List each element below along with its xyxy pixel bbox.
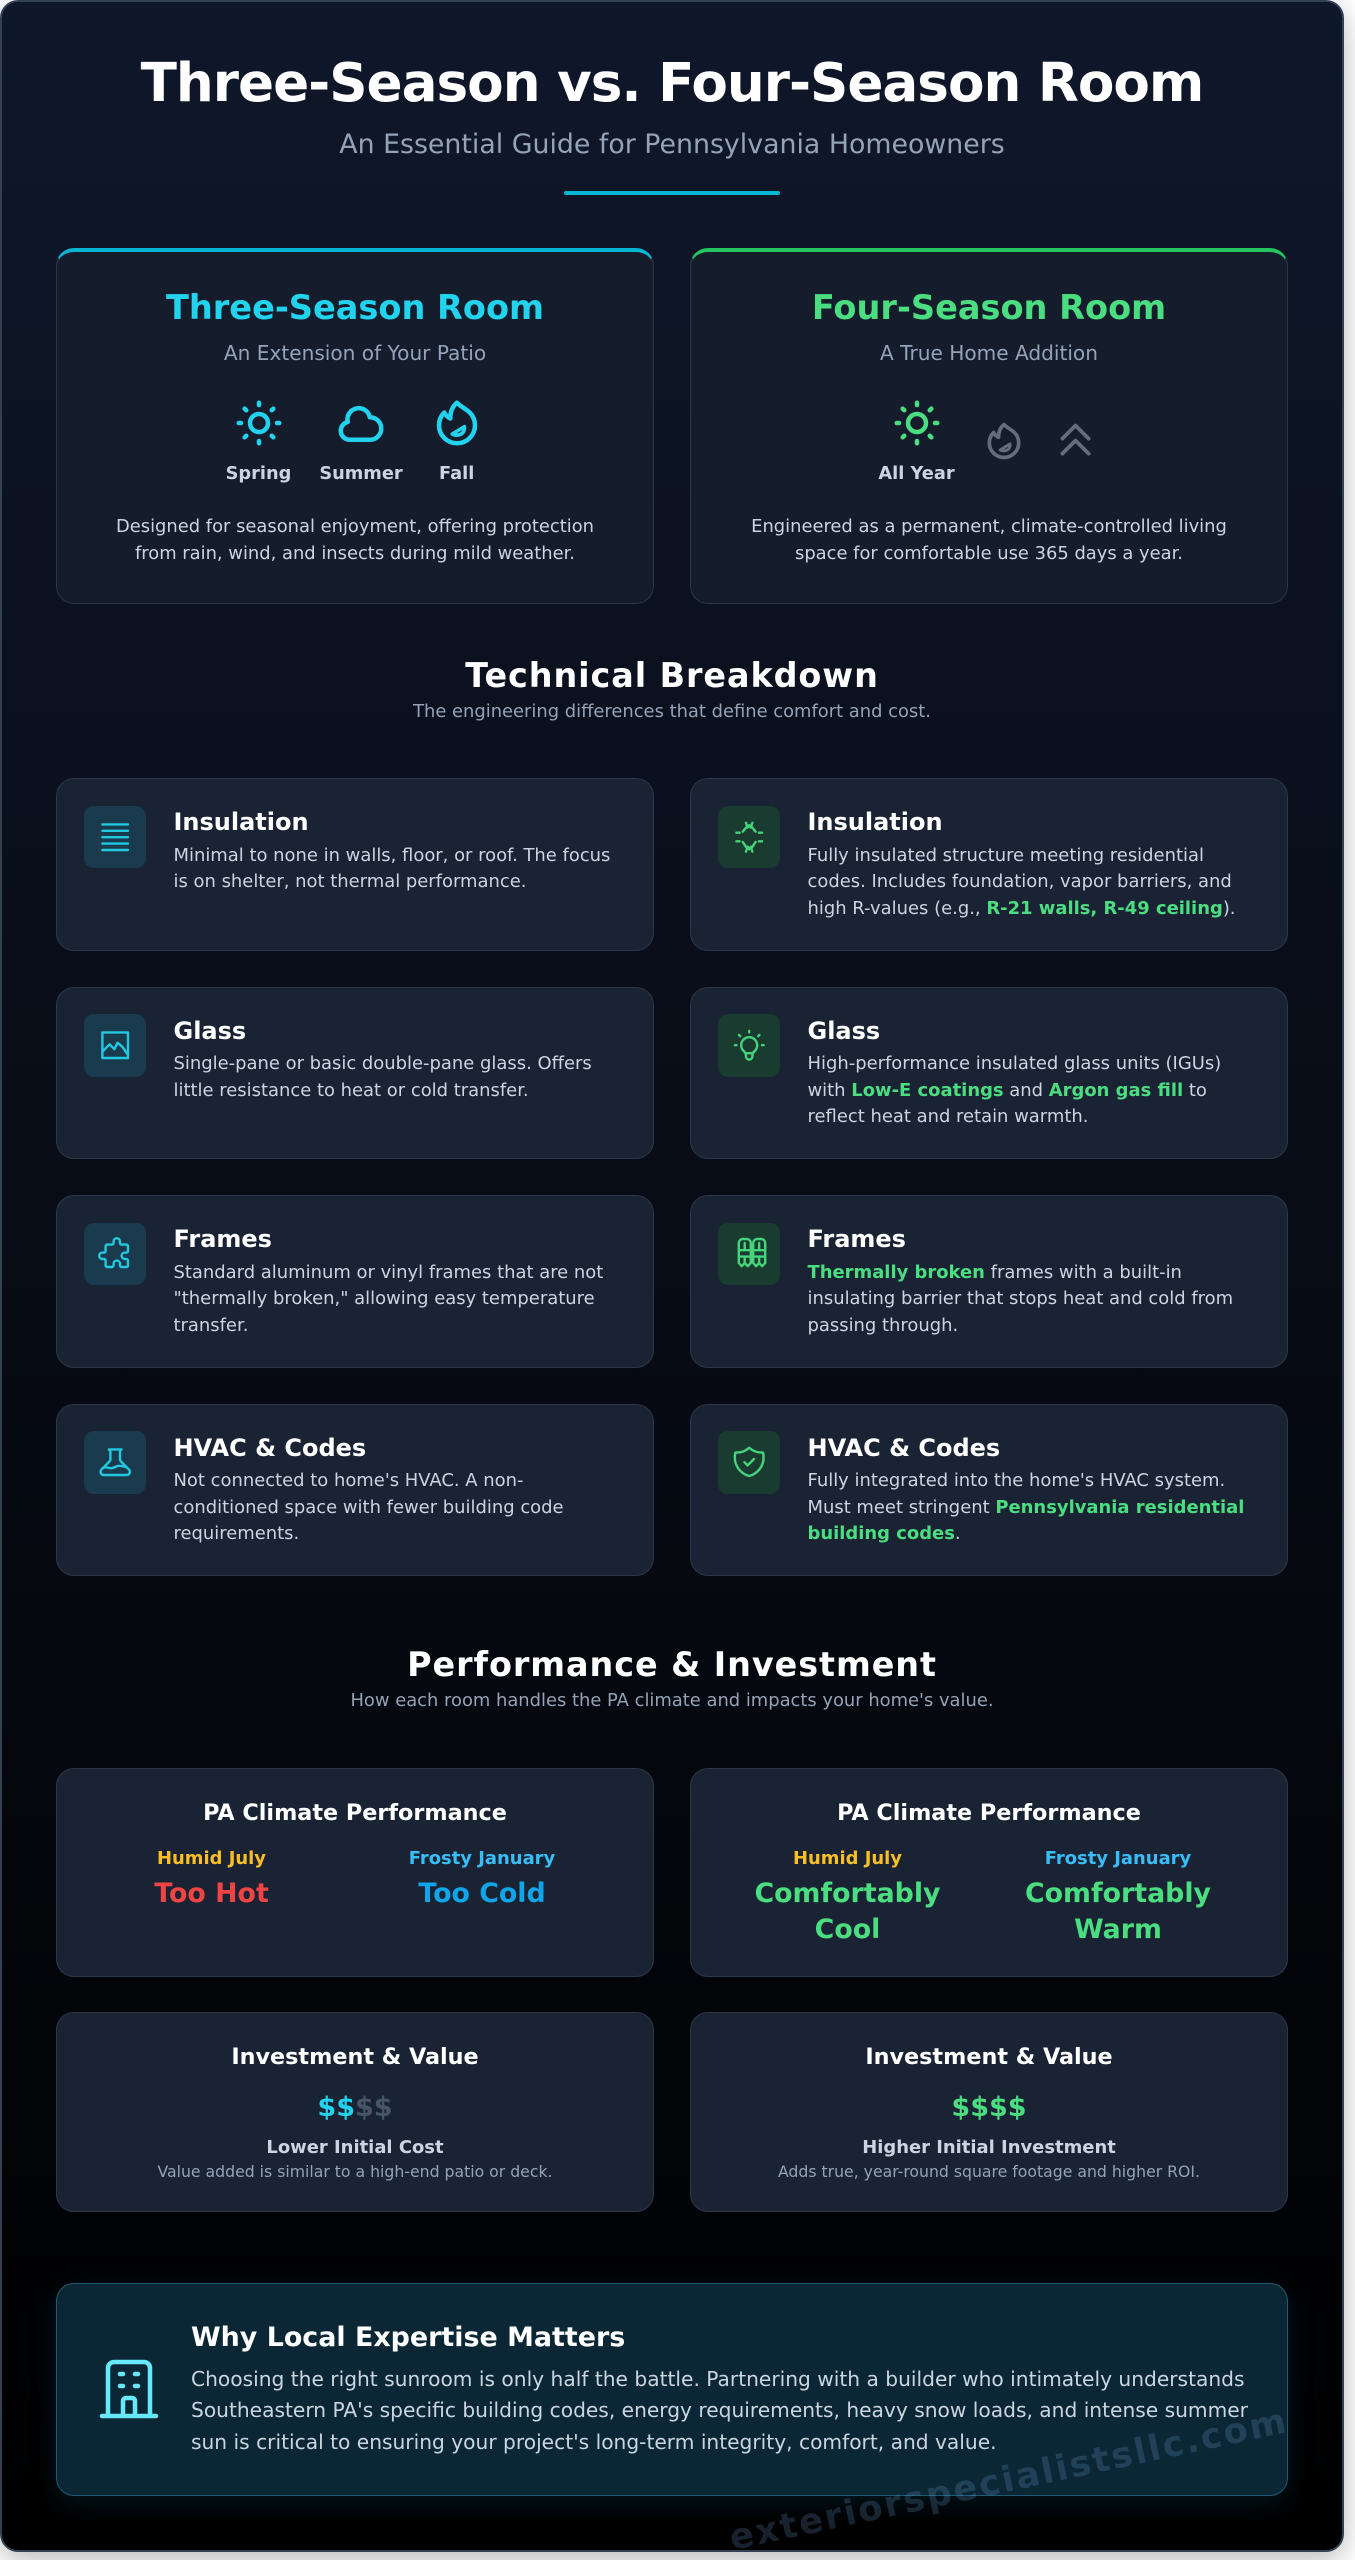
- icon: light bulb: [718, 1014, 780, 1076]
- description: Designed for seasonal enjoyment, offering protection: [116, 516, 594, 537]
- panel: glass, four-season: [690, 986, 1288, 1159]
- label: summer: Summer: [319, 463, 403, 484]
- value: comfortably warm: [1025, 1878, 1211, 1945]
- card text: high R-values (e.g., R-21 walls, R-49 ceiling).: [808, 898, 1236, 919]
- card text: [808, 1470, 1244, 1544]
- label: frosty january: Frosty January: [1045, 1848, 1191, 1869]
- panel: frames, three-season: [56, 1195, 654, 1368]
- cost label: Higher Initial Investment: [862, 2136, 1116, 2158]
- card title: Insulation: [808, 808, 943, 836]
- icon: shield check: [718, 1431, 780, 1494]
- tagline: A True Home Addition: [880, 341, 1098, 365]
- title divider: [564, 190, 780, 195]
- card text: Standard aluminum or vinyl frames that are not: [174, 1262, 603, 1282]
- panel: climate performance, four-season: [690, 1768, 1288, 1977]
- card text: [808, 844, 1236, 919]
- panel: insulation, three-season: [56, 778, 654, 950]
- card text: "thermally broken," allowing easy temperature: [174, 1288, 595, 1309]
- card text: Must meet stringent Pennsylvania residential: [808, 1497, 1244, 1518]
- card text: [174, 844, 610, 892]
- callout text: sun is critical to ensuring your project's long-term integrity, comfort, and value.: [191, 2430, 997, 2454]
- panel: climate performance, three-season: [56, 1768, 654, 1977]
- card text: with Low-E coatings and Argon gas fill to: [808, 1080, 1207, 1101]
- card title: Investment & Value: [865, 2044, 1113, 2070]
- card title: Insulation: [174, 808, 309, 836]
- card text: is on shelter, not thermal performance.: [174, 871, 526, 892]
- value: too hot: Too Hot: [154, 1878, 269, 1909]
- card title: Glass: [808, 1017, 880, 1045]
- card text: [174, 1053, 592, 1101]
- callout text: [191, 2366, 1248, 2454]
- title: Three-Season vs. Four-Season Room: [141, 52, 1203, 114]
- card text: little resistance to heat or cold transfer.: [174, 1080, 529, 1101]
- icon: flame: [436, 400, 478, 446]
- tagline: An Extension of Your Patio: [224, 341, 486, 365]
- section heading: technical breakdown: Technical Breakdown: [465, 656, 879, 695]
- subtitle: An Essential Guide for Pennsylvania Homeowners: [339, 129, 1005, 160]
- label: humid july: Humid July: [157, 1848, 266, 1869]
- value: too cold: Too Cold: [418, 1878, 546, 1909]
- card text: [174, 1470, 564, 1544]
- cost rating: $$$$: [317, 2092, 393, 2123]
- label: spring: Spring: [226, 463, 291, 484]
- card text: reflect heat and retain warmth.: [808, 1106, 1088, 1127]
- callout title: Why Local Expertise Matters: [191, 2322, 625, 2353]
- icon: cloud: [338, 406, 384, 442]
- card title: PA Climate Performance: [837, 1800, 1141, 1826]
- card text: conditioned space with fewer building code: [174, 1497, 564, 1518]
- panel: hvac, four-season: [690, 1404, 1288, 1576]
- icon: puzzle piece: [84, 1222, 146, 1285]
- panel: investment, three-season: [56, 2012, 654, 2212]
- icon: picture pane: [84, 1014, 146, 1076]
- panel: hvac, three-season: [56, 1404, 654, 1576]
- cost label: Lower Initial Cost: [266, 2136, 444, 2158]
- icon: muted flame: [988, 422, 1020, 460]
- card text: transfer.: [174, 1315, 248, 1336]
- icon: insulation layers: [718, 806, 780, 868]
- card title: HVAC & Codes: [808, 1434, 1000, 1462]
- value: comfortably cool: Cool: [815, 1914, 880, 1945]
- value: comfortably warm: Warm: [1074, 1914, 1162, 1945]
- label: all year: All Year: [878, 463, 955, 484]
- label: fall: Fall: [439, 463, 474, 484]
- panel: investment, four-season: [690, 2012, 1288, 2212]
- card text: [808, 1053, 1221, 1127]
- card text: Fully integrated into the home's HVAC system.: [808, 1470, 1225, 1491]
- panel: three-season room overview: [56, 248, 654, 604]
- callout text: Choosing the right sunroom is only half the battle. Partnering with a builder who intimately understands: [191, 2366, 1244, 2390]
- heading: four-season room: Four-Season Room: [812, 288, 1166, 326]
- card text: Minimal to none in walls, floor, or roof. The focus: [174, 844, 610, 866]
- icon: office building: [100, 2360, 158, 2418]
- value: comfortably cool: Comfortably: [754, 1878, 940, 1909]
- description: [116, 516, 594, 564]
- card title: PA Climate Performance: [203, 1800, 507, 1826]
- label: frosty january: Frosty January: [409, 1848, 555, 1869]
- value: comfortably warm: Comfortably: [1025, 1878, 1211, 1909]
- callout text: Southeastern PA's specific building codes, energy requirements, heavy snow loads, and intense summer: [191, 2398, 1248, 2422]
- card text: codes. Includes foundation, vapor barriers, and: [808, 871, 1232, 892]
- heading: three-season room: Three-Season Room: [166, 288, 544, 326]
- card text: Fully insulated structure meeting residential: [808, 844, 1204, 866]
- card text: [174, 1262, 603, 1336]
- cost rating: $$$$: [951, 2092, 1027, 2123]
- card text: High-performance insulated glass units (IGUs): [808, 1053, 1221, 1074]
- card title: Investment & Value: [231, 2044, 479, 2070]
- card text: [808, 1262, 1233, 1336]
- card title: Frames: [808, 1225, 906, 1253]
- icon: sun: [236, 400, 282, 446]
- icon: thermally broken frames: [718, 1222, 780, 1285]
- card text: Not connected to home's HVAC. A non-: [174, 1470, 523, 1491]
- section heading: performance and investment: Performance & Investment: [407, 1645, 937, 1684]
- card text: building codes.: [808, 1523, 961, 1544]
- card text: passing through.: [808, 1315, 958, 1336]
- description: Engineered as a permanent, climate-controlled living: [751, 516, 1227, 537]
- value note: Adds true, year-round square footage and higher ROI.: [778, 2162, 1200, 2181]
- label: humid july: Humid July: [793, 1848, 902, 1869]
- callout: why local expertise matters: [56, 2283, 1288, 2496]
- section subheading: The engineering differences that define comfort and cost.: [413, 700, 931, 722]
- section subheading: How each room handles the PA climate and impacts your home's value.: [350, 1690, 994, 1710]
- description: from rain, wind, and insects during mild weather.: [135, 543, 575, 564]
- description: [751, 516, 1227, 564]
- panel: four-season room overview: [690, 248, 1288, 604]
- icon: flask: [84, 1431, 146, 1494]
- icon: sun: [894, 400, 940, 446]
- icon: layered lines: [84, 806, 146, 868]
- card title: Frames: [174, 1225, 272, 1253]
- value note: Value added is similar to a high-end patio or deck.: [157, 2162, 553, 2181]
- card title: HVAC & Codes: [174, 1434, 366, 1462]
- value: comfortably cool: [754, 1878, 940, 1945]
- panel: glass, three-season: [56, 986, 654, 1159]
- panel: frames, four-season: [690, 1195, 1288, 1368]
- card text: insulating barrier that stops heat and cold from: [808, 1288, 1233, 1309]
- card text: Single-pane or basic double-pane glass. Offers: [174, 1053, 592, 1074]
- card title: Glass: [174, 1017, 246, 1045]
- card text: requirements.: [174, 1523, 299, 1544]
- card text: Thermally broken frames with a built-in: [808, 1262, 1182, 1282]
- icon: muted double chevron: [1060, 424, 1091, 456]
- description: space for comfortable use 365 days a year.: [795, 543, 1183, 564]
- panel: insulation, four-season: [690, 778, 1288, 950]
